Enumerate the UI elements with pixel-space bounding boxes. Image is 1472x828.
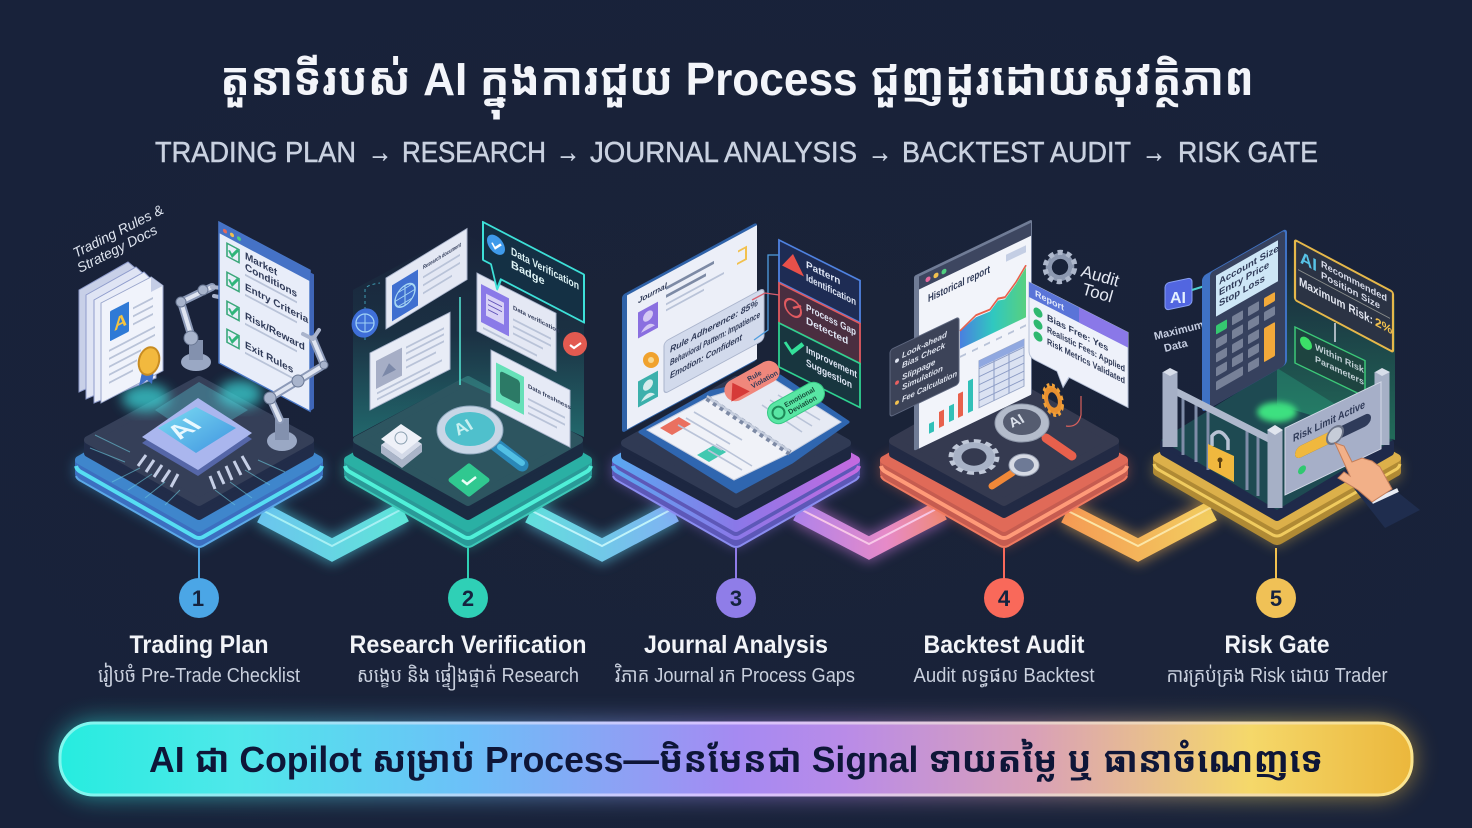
label: audit tool: Tool [1080,280,1115,306]
step 5 caption: Risk Gate [1224,631,1330,659]
card: right upper: Data verification [513,305,560,335]
callout: data verification badge [483,222,584,335]
panel: risk gate scene [1153,228,1420,548]
step 5 caption: ការគ្រប់គ្រង Risk ដោយ Trader [1166,665,1388,687]
step 2 caption [350,631,586,691]
banner text: AI ជា Copilot សម្រាប់ Process—មិនមែនជា Signal ទាយតម្លៃ ឬ ធានាចំណេញទេ [149,739,1323,782]
label: maximum data: Data [1163,337,1190,355]
connector: backtest to risk [1066,507,1212,550]
card: recommended position size: 2% [1375,314,1393,338]
calculator: Entry Price [1219,260,1269,299]
step marker 5: 5 [1270,586,1282,611]
step 4 caption: Audit លទ្ធផល Backtest [914,665,1095,688]
subtitle: process flow: → [868,137,892,169]
step marker 5 [1256,548,1296,618]
panel: backtest audit scene [880,219,1128,548]
card: process gap detected [779,283,860,364]
label: trading rules: Trading Rules & [70,201,166,261]
card: within risk parameters: Parameters [1315,354,1364,388]
card: recommended position size [1295,240,1393,352]
connector: journal to backtest [798,506,942,548]
checklist panel [219,222,314,413]
connector: research to journal [530,508,674,550]
panel: research verification scene [344,222,592,548]
journal panel [622,222,757,433]
card: process gap detected: Process Gap [806,302,856,339]
card: top left globe [386,229,467,329]
hologram glow [122,380,262,440]
icon: gold medal [136,345,162,386]
icon: AI chip small: AI [1170,290,1186,307]
step 4 caption [914,631,1095,688]
historical report panel: Historical report [928,263,990,305]
card: dark checklist [890,317,959,417]
robot arm right [264,330,328,451]
card: dark checklist: Simulation [902,363,943,392]
platform 1 [75,380,323,548]
step 4 caption: Backtest Audit [924,631,1085,659]
calculator [1202,228,1287,413]
platform 5 [1153,368,1401,548]
card: improvement suggestion: Improvement [806,344,857,381]
card: dark checklist: Fee Calculation [902,368,957,404]
icon: small magnifier [992,454,1039,486]
open journal book [640,376,848,492]
platform 4 [880,378,1128,548]
card: recommended position size: Recommended [1321,259,1387,305]
step marker 2 [448,548,488,618]
icon: magnifier AI dark: AI [1006,412,1028,431]
documents stack [79,262,163,403]
platform 3 [612,380,860,548]
icon: magnifier AI dark [995,404,1072,456]
card: behaviour summary: Rule Adherence: 85% [670,298,758,356]
label: audit tool: Audit [1079,262,1122,291]
label: audit tool [1079,262,1122,306]
card: improvement suggestion [779,323,860,408]
icon: magnifier AI [437,406,522,465]
step marker 4: 4 [998,586,1011,611]
icon: AI chip: AI [159,414,208,443]
platform 2 [344,380,592,548]
document: strategy page: A [114,309,127,336]
calculator: Account Size [1219,243,1279,288]
card: recommended position size: Position Size [1321,270,1380,312]
card: report: Bias Free: Yes [1047,313,1108,354]
label: maximum data: Maximum [1153,319,1205,343]
card: report: Risk Metrics Validated [1047,337,1125,387]
green glass wall [1257,245,1395,440]
card: pattern identification: Identification [806,272,856,308]
callout: data verification badge: Badge [511,258,545,288]
badge: rule violation: Violation [750,370,779,390]
subtitle: process flow: BACKTEST AUDIT [902,137,1131,169]
subtitle: process flow: JOURNAL ANALYSIS [590,137,857,169]
step marker 4 [984,548,1024,618]
icon: padlock [1208,432,1234,482]
badge: emotional condition: Deviation [787,395,818,416]
icon: magnifier AI: AI [450,415,476,439]
icon: AI chip [90,398,285,505]
panel: journal analysis scene [612,222,860,548]
callout: data verification badge: Data Verification [511,245,579,293]
card: pattern identification [779,240,860,322]
icon: paper stack [381,424,422,468]
step 1 caption: រៀបចំ Pre-Trade Checklist [98,662,300,687]
step 1 caption [98,631,300,687]
subtitle: process flow [155,137,1318,169]
step 2 caption: សង្ខេប និង ផ្ទៀងផ្ទាត់ Research [357,662,579,691]
step 1 caption: Trading Plan [130,631,268,659]
icon: orange gear [1042,380,1064,420]
icon: orange token [643,352,659,368]
label: trading rules: Strategy Docs [74,221,160,276]
badge: rule violation [720,357,784,405]
icon: globe badge [347,304,383,342]
step marker 1 [179,548,219,618]
title: តួនាទីរបស់ AI ក្នុងការជួយ Process ជួញដូរដោយសុវត្ថិភាព [220,53,1254,120]
step marker 3 [716,548,756,618]
card: process gap detected: Detected [806,315,848,347]
fence left with lock [1163,368,1273,496]
card: right upper [477,273,560,373]
badge: emotional condition: Emotional [783,387,817,409]
card: report: Realistic Fees: Applied [1047,325,1125,375]
card: dark checklist: Bias Check [902,339,946,370]
post centre [1267,425,1283,508]
subtitle: process flow: RESEARCH [402,137,546,169]
journal panel: Journal [638,280,667,305]
subtitle: process flow: → [368,137,392,169]
step 3 caption [615,631,855,687]
card: recommended position size: Maximum Risk: [1299,274,1373,327]
robot arm left [176,285,224,371]
icon: green check tile [451,466,487,494]
icon: AI chip small [1165,278,1208,310]
subtitle: process flow: TRADING PLAN [155,137,356,169]
card: recommended position size: AI [1300,248,1317,275]
step 3 caption: Journal Analysis [644,631,828,659]
icon: grey gear [951,441,997,473]
historical report panel [914,219,1032,451]
banner [58,721,1414,797]
step 5 caption [1166,631,1388,687]
card: report [1029,282,1128,420]
card: right lower: Data freshness [528,383,571,412]
subtitle: process flow: → [1142,137,1166,169]
icon: red check [563,332,587,356]
card: right lower [491,350,571,448]
fence post right [1375,368,1390,445]
badge: emotional condition [764,378,828,428]
calculator: Stop Loss [1219,273,1265,310]
card: behaviour summary [664,288,764,394]
glass walls [353,232,584,437]
step marker 1: 1 [192,586,204,611]
step marker 3: 3 [730,586,742,611]
icon: audit gear [1043,250,1077,284]
gate panel: risk limit active [1285,382,1381,495]
subtitle: process flow: RISK GATE [1178,137,1318,169]
gate panel: risk limit active: Risk Limit Active [1293,398,1365,445]
card: pattern identification: Pattern [806,259,840,288]
card: dark checklist: Look-ahead [902,329,948,360]
document: strategy page [101,271,163,403]
card: improvement suggestion: Suggestion [806,357,852,391]
connector: plan to research [262,508,404,550]
card: behaviour summary: Emotion: Confident [670,332,743,382]
panel: trading plan scene [70,201,328,548]
card: left lower image [370,312,450,410]
card: within risk parameters [1295,327,1365,397]
step 2 caption: Research Verification [350,631,586,659]
card: behaviour summary: Behavioral Pattern: Impatience [670,309,760,369]
checklist panel: Risk/Reward [245,310,305,353]
card: within risk parameters: Within Risk [1315,342,1365,376]
step marker 2: 2 [462,586,474,611]
checklist panel: Conditions [245,261,297,300]
subtitle: process flow: → [556,137,580,169]
card: top left globe: Research document [423,241,462,271]
checklist panel: Exit Rules [245,339,293,376]
circuit lines [752,255,779,340]
badge: rule violation: Rule [746,370,763,383]
checklist panel: Entry Criteria [245,281,308,326]
card: dark checklist: Slippage [902,357,936,382]
label: maximum data [1153,319,1205,355]
icon: hand pressing slider [1335,443,1420,528]
checklist panel: Market [245,250,278,279]
card: report: Report [1035,289,1065,314]
step 3 caption: វិភាគ Journal រក Process Gaps [615,663,855,687]
